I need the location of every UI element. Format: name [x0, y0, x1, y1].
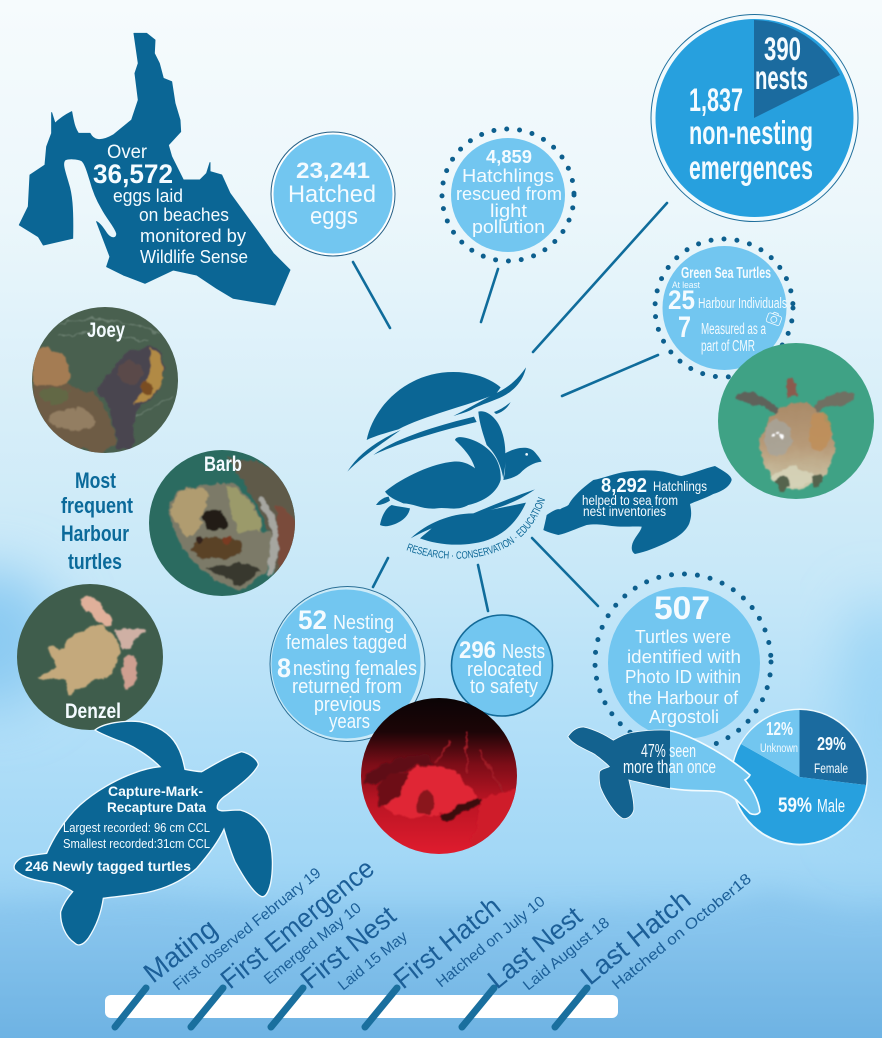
turtle chart: 47% seen more than once [568, 727, 760, 818]
photo name: Joey [87, 319, 125, 342]
event: last hatch: Hatched on October18 [609, 870, 755, 993]
event: last hatch [575, 870, 755, 993]
photo name: Barb [204, 453, 242, 476]
stat circle: hatchlings rescued [442, 129, 574, 261]
pie chart: sex ratio [731, 708, 868, 846]
hatchling turtle silhouette: helped to sea: 8,292 [601, 475, 647, 497]
stat circle: nesting females: Nesting [333, 612, 394, 634]
stat circle: hatchlings rescued: Hatchlings [462, 166, 554, 186]
turtle chart: 47% seen more than once: 47% seen [641, 741, 696, 761]
event: first emergence: First Emergence [215, 853, 380, 995]
photo: Barb [148, 450, 302, 600]
stat circle: 507 turtles photo ID: the Harbour of [628, 688, 739, 708]
photo: Joey [30, 305, 180, 455]
hatchling turtle silhouette: helped to sea: Hatchlings [653, 478, 707, 494]
pie chart: sex ratio: 12% [766, 719, 793, 739]
stat circle: nesting females: returned from [292, 676, 402, 698]
pie chart: nests vs non-nesting emergences: non-nesting [689, 114, 813, 151]
stat circle: nests relocated: 296 [459, 637, 496, 664]
timeline bar [105, 995, 618, 1018]
heading: most frequent harbour turtles: Most [75, 468, 117, 493]
turtle silhouette: capture-mark-recapture data: Capture-Mark- [108, 783, 203, 799]
photo: Denzel [15, 582, 165, 732]
event: mating: Mating [138, 913, 223, 989]
turtle silhouette: capture-mark-recapture data: Smallest recorded:31cm CCL [63, 836, 210, 851]
stat circle: nests relocated: Nests [502, 641, 545, 663]
event: first nest: First Nest [295, 900, 402, 995]
stat circle: hatchlings rescued: pollution [472, 217, 545, 237]
logo tagline: RESEARCH · CONSERVATION · EDUCATION [406, 497, 545, 559]
pie chart: nests vs non-nesting emergences: 390 [764, 31, 801, 67]
stat circle: nesting females: years [329, 711, 370, 733]
stat circle: hatched eggs [271, 132, 395, 256]
logo: research conservation education [348, 368, 545, 559]
timeline ticks [115, 988, 587, 1027]
turtle silhouette: capture-mark-recapture data: 246 Newly tagged turtles [25, 858, 191, 874]
pie chart: sex ratio: 29% [817, 734, 846, 754]
turtle silhouette: capture-mark-recapture data: Largest recorded: 96 cm CCL [63, 820, 210, 835]
island map: eggs laid: monitored by [140, 226, 246, 246]
stat circle: hatchlings rescued: rescued from [456, 184, 562, 204]
stat circle: nesting females: previous [314, 694, 381, 716]
island map: eggs laid: Over [107, 142, 148, 163]
stat circle: nesting females: females tagged [286, 632, 407, 654]
heading: most frequent harbour turtles [61, 468, 134, 574]
island map: eggs laid: Wildlife Sense [140, 247, 248, 267]
stat circle: nesting females: 8 [277, 653, 291, 683]
hatchling turtle silhouette: helped to sea: nest inventories [583, 504, 666, 519]
stat circle: nesting females: 52 [298, 605, 327, 635]
pie chart: sex ratio: Male [817, 796, 845, 816]
stat circle: green sea turtles: Harbour Individuals [698, 295, 787, 312]
hatchling turtle silhouette: helped to sea [543, 466, 732, 554]
connector lines from logo [353, 203, 667, 611]
turtle chart: 47% seen more than once: more than once [623, 757, 716, 777]
heading: most frequent harbour turtles: frequent [61, 493, 134, 518]
timeline [105, 853, 755, 1027]
stat circle: hatchlings rescued: light [490, 201, 527, 221]
stat circle: 507 turtles photo ID [595, 574, 771, 750]
pie chart: nests vs non-nesting emergences: 1,837 [689, 82, 743, 118]
pie chart: sex ratio: Female [814, 761, 848, 776]
event: last hatch: Last Hatch [575, 884, 696, 991]
event: last nest: Laid August 18 [520, 914, 613, 994]
stat circle: nesting females: nesting females [293, 658, 417, 680]
stat circle: hatchlings rescued: 4,859 [486, 147, 532, 167]
heading: most frequent harbour turtles: Harbour [61, 521, 129, 546]
turtle silhouette: capture-mark-recapture data: Recapture Data [107, 799, 206, 815]
stat circle: 507 turtles photo ID: Turtles were [635, 627, 731, 647]
island map: eggs laid [19, 33, 290, 305]
pie chart: nests vs non-nesting emergences [651, 14, 858, 222]
turtle silhouette: capture-mark-recapture data [14, 721, 272, 945]
stat circle: green sea turtles: At least [672, 280, 700, 291]
stat circle: green sea turtles: 7 [678, 311, 691, 344]
pie chart: nests vs non-nesting emergences: nests [755, 59, 808, 96]
stat circle: green sea turtles: Green Sea Turtles [681, 265, 771, 282]
event: mating: First observed February 19 [170, 864, 324, 994]
pie chart: nests vs non-nesting emergences: emergences [689, 149, 813, 186]
event: first hatch: First Hatch [388, 891, 506, 995]
stat circle: hatched eggs: Hatched [288, 181, 376, 208]
icon: camera [766, 310, 783, 326]
island map: eggs laid: eggs laid [113, 186, 183, 206]
island map: eggs laid: 36,572 [93, 159, 173, 189]
photo: nesting turtle under red light [360, 697, 518, 855]
pie chart: sex ratio: Unknown [760, 743, 798, 755]
island map: eggs laid: on beaches [139, 205, 229, 225]
stat circle: nesting females [270, 586, 425, 742]
stat circle: green sea turtles: Measured as a [701, 321, 766, 338]
stat circle: 507 turtles photo ID: Argostoli [649, 707, 719, 727]
photo name: Denzel [65, 700, 121, 723]
event: first nest: Laid 15 May [335, 928, 411, 994]
event: last nest: Last Nest [482, 901, 588, 995]
stat circle: 507 turtles photo ID: 507 [654, 590, 710, 626]
pie chart: sex ratio: 59% [778, 794, 812, 817]
stat circle: green sea turtles [655, 239, 793, 377]
stat circle: hatched eggs: 23,241 [296, 158, 370, 183]
event: first hatch: Hatched on July 10 [433, 893, 548, 991]
photo: green sea turtle [718, 343, 874, 499]
stat circle: nests relocated: to safety [470, 676, 538, 698]
hatchling turtle silhouette: helped to sea: helped to sea from [582, 493, 678, 508]
stat circle: 507 turtles photo ID: identified with [627, 647, 741, 667]
stat circle: hatched eggs: eggs [310, 203, 358, 230]
heading: most frequent harbour turtles: turtles [68, 549, 122, 574]
stat circle: green sea turtles: part of CMR [701, 338, 755, 355]
stat circle: nests relocated [452, 615, 552, 716]
stat circle: green sea turtles: 25 [668, 285, 695, 315]
event: first emergence: Emerged May 10 [261, 899, 365, 988]
stat circle: nests relocated: relocated [467, 659, 542, 681]
stat circle: 507 turtles photo ID: Photo ID within [625, 667, 741, 687]
